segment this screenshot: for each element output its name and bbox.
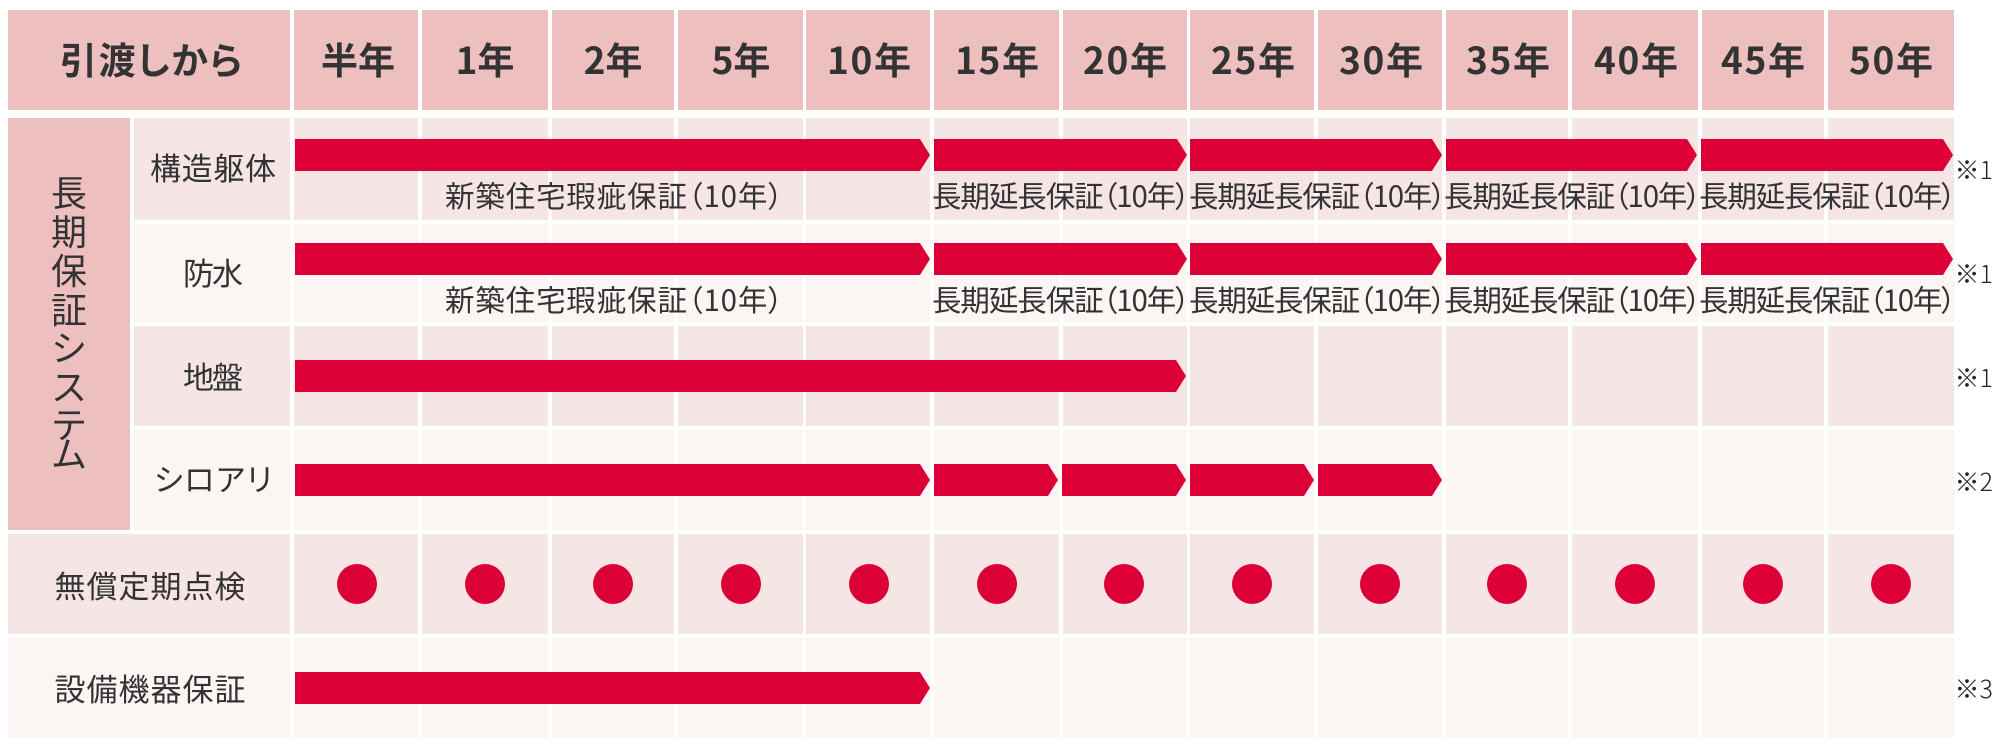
- header row: 40年: [1594, 31, 1678, 85]
- header row: 15年: [955, 31, 1039, 85]
- row: 構造躯体: 長期延長保証（10年）: [1699, 174, 1956, 216]
- header row: 25年: [1211, 31, 1295, 85]
- row: 防水: 防水: [183, 249, 243, 294]
- row: 防水: 長期延長保証（10年）: [932, 278, 1190, 320]
- panel: long-term warranty side label: 長期保証システム: [51, 173, 87, 475]
- header row: 1年: [456, 31, 514, 85]
- row: 構造躯体: [134, 118, 1993, 220]
- header row: 20年: [1083, 31, 1167, 85]
- header row: 50年: [1849, 31, 1933, 85]
- row: 構造躯体: 長期延長保証（10年）: [932, 174, 1190, 216]
- row: 地盤: [134, 326, 1993, 426]
- row: シロアリ: シロアリ: [154, 455, 272, 500]
- row: 構造躯体: 長期延長保証（10年）: [1189, 174, 1446, 216]
- header row: 45年: [1721, 31, 1805, 85]
- row: 防水: 長期延長保証（10年）: [1699, 278, 1956, 320]
- row: 防水: ※1: [1954, 255, 1993, 291]
- row: 構造躯体: 新築住宅瑕疵保証（10年）: [445, 174, 783, 216]
- row: シロアリ: ※2: [1954, 463, 1993, 499]
- row: 無償定期点検: 無償定期点検: [54, 562, 246, 607]
- header row: 半年: [321, 31, 395, 85]
- row: 設備機器保証: ※3: [1954, 670, 1993, 706]
- row: 無償定期点検: [8, 534, 1954, 634]
- row: 防水: 新築住宅瑕疵保証（10年）: [445, 278, 783, 320]
- row: 防水: 長期延長保証（10年）: [1189, 278, 1446, 320]
- header row: 5年: [712, 31, 770, 85]
- row: 設備機器保証: [8, 638, 1993, 738]
- header row: 30年: [1339, 31, 1423, 85]
- row: 地盤: ※1: [1954, 359, 1993, 395]
- row: 防水: 長期延長保証（10年）: [1444, 278, 1701, 320]
- row: シロアリ: [134, 430, 1993, 530]
- row: 構造躯体: 構造躯体: [150, 144, 276, 189]
- row: 地盤: 地盤: [183, 353, 243, 398]
- header row: 35年: [1466, 31, 1550, 85]
- row: 構造躯体: ※1: [1954, 151, 1993, 187]
- row: 構造躯体: 長期延長保証（10年）: [1444, 174, 1701, 216]
- row: 防水: [134, 224, 1993, 322]
- row: 設備機器保証: 設備機器保証: [54, 665, 246, 710]
- header row: [8, 10, 1954, 110]
- panel: long-term warranty side label: [8, 118, 130, 530]
- header row: 10年: [827, 31, 911, 85]
- header row: 引渡しから: [60, 31, 242, 85]
- header row: 2年: [584, 31, 642, 85]
